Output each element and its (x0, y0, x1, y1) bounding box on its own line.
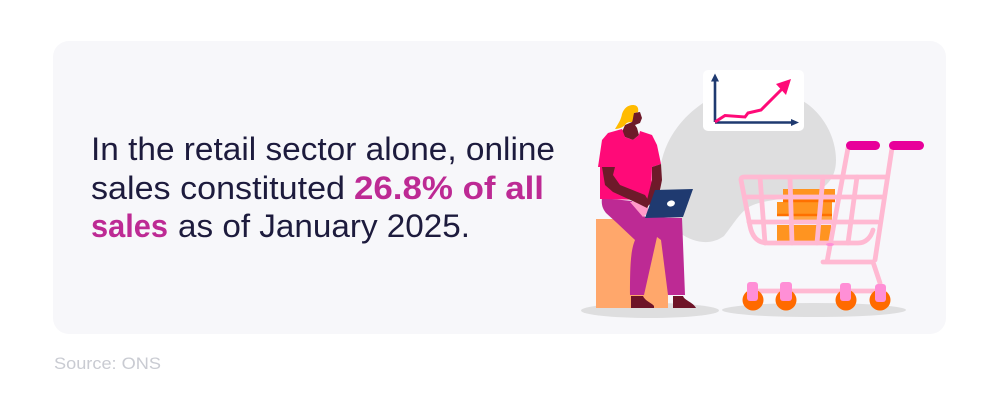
text block: retail statistic (91, 131, 555, 244)
text block: retail statistic: sales (91, 208, 168, 244)
seat box (596, 219, 668, 308)
background blob (660, 95, 836, 242)
source note: Source: ONS (54, 355, 161, 373)
text block: retail statistic: sales constituted (91, 170, 345, 206)
stacked boxes in cart (777, 189, 835, 241)
person (598, 105, 696, 308)
text block: retail statistic: as of January 2025. (178, 208, 470, 244)
panel: main card (53, 41, 946, 334)
text block: retail statistic: In the retail sector alone, online (91, 131, 555, 167)
ground shadow: cart (722, 303, 906, 317)
illustration: shopper with cart (581, 70, 924, 318)
cart wheels (742, 243, 890, 310)
text block: retail statistic: 26.8% of all (354, 170, 544, 206)
ground shadow: person (581, 303, 719, 318)
cart handles (846, 141, 924, 150)
shopping cart (741, 141, 924, 310)
chart card (703, 70, 804, 131)
laptop (645, 189, 693, 218)
